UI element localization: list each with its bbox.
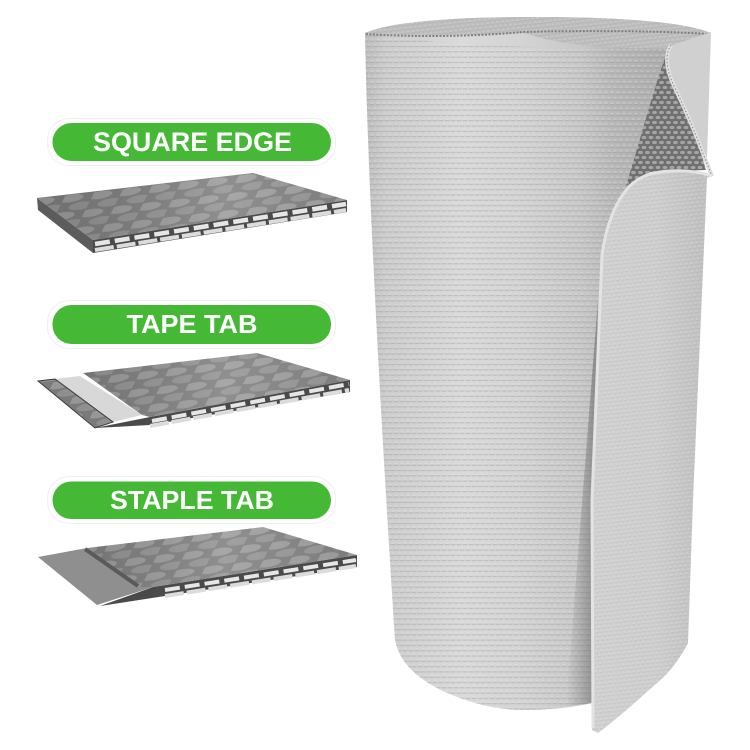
upper curled flap <box>667 32 712 177</box>
label: staple tab: STAPLE TAB <box>110 485 274 515</box>
label: square edge <box>48 118 336 166</box>
label: staple tab <box>48 476 336 524</box>
roll body <box>365 17 711 710</box>
shadow beside unrolled sheet <box>566 300 598 706</box>
roll top surface <box>365 17 711 48</box>
unrolled front sheet <box>592 171 712 733</box>
folded tab edge <box>38 379 113 428</box>
stapling flange <box>38 548 153 605</box>
label: tape tab <box>48 300 336 348</box>
insulation roll <box>365 17 712 733</box>
seam line <box>85 549 138 586</box>
label: tape tab: TAPE TAB <box>126 309 258 339</box>
panel sample: staple tab <box>38 527 357 606</box>
panel sample: tape tab <box>38 353 350 428</box>
label: square edge: SQUARE EDGE <box>93 127 292 157</box>
panel sample: square edge <box>37 173 347 253</box>
adhesive tape strip <box>55 376 142 422</box>
inner dark side of the peeled layer <box>626 52 706 186</box>
